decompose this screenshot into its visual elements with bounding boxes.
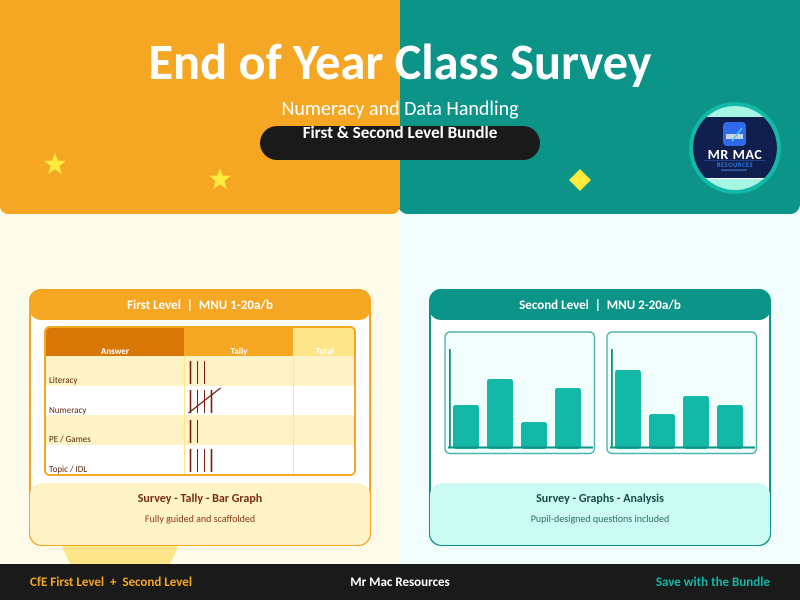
table header: answer: Answer <box>101 346 129 357</box>
bar chart: right <box>606 331 758 454</box>
bar chart: left <box>444 331 596 454</box>
row: PE / games: PE / Games <box>49 434 91 445</box>
second level caption panel <box>430 483 770 544</box>
subtitle: Numeracy and Data Handling <box>281 97 519 121</box>
badge: bundle: First & Second Level Bundle <box>303 122 497 143</box>
footer bar <box>0 564 800 600</box>
header panel: orange <box>0 0 400 214</box>
table header: total <box>293 328 356 356</box>
icon: star centre <box>209 168 231 189</box>
first level caption panel <box>30 483 370 544</box>
logo badge: MR MAC <box>708 146 762 163</box>
footer centre text: Mr Mac Resources <box>350 574 450 590</box>
panel: first level card <box>29 289 371 546</box>
row: PE / games <box>46 415 356 445</box>
second level card header <box>429 289 771 320</box>
caption heading: Survey - Graphs - Analysis <box>536 492 664 506</box>
decorative circle behind first level card <box>60 470 180 590</box>
tally table <box>44 326 356 476</box>
row: literacy: Literacy <box>49 375 77 386</box>
header panel: teal <box>398 0 800 214</box>
column divider: tally <box>184 356 185 475</box>
caption heading: Survey - Tally - Bar Graph <box>138 492 262 506</box>
badge: bundle <box>260 126 540 160</box>
icon: diamond <box>569 169 591 191</box>
row: topic / IDL: Topic / IDL <box>49 464 87 475</box>
row: numeracy: Numeracy <box>49 405 86 416</box>
table header: tally: Tally <box>231 346 247 357</box>
second level card header: Second Level | MNU 2-20a/b <box>519 298 681 313</box>
table header: total: Total <box>316 346 334 357</box>
first level card header: First Level | MNU 1-20a/b <box>127 298 273 313</box>
table header: answer <box>46 328 184 356</box>
background: right half <box>400 0 800 600</box>
table header: tally <box>184 328 293 356</box>
footer left text: CfE First Level + Second Level <box>30 574 192 590</box>
title: End of Year Class Survey <box>148 31 652 93</box>
caption text: Fully guided and scaffolded <box>145 512 255 525</box>
background: left half <box>0 0 400 600</box>
row: numeracy <box>46 386 356 415</box>
icon: star left <box>44 153 66 174</box>
caption text: Pupil-designed questions included <box>531 512 669 525</box>
column divider: total <box>293 356 294 475</box>
logo badge <box>689 102 781 194</box>
row: literacy <box>46 356 356 386</box>
logo badge: RESOURCES <box>717 161 753 169</box>
row: topic / IDL <box>46 445 356 475</box>
first level card header <box>29 289 371 320</box>
footer right text: Save with the Bundle <box>656 574 770 590</box>
tally marks <box>188 361 221 472</box>
panel: second level card <box>429 289 771 546</box>
